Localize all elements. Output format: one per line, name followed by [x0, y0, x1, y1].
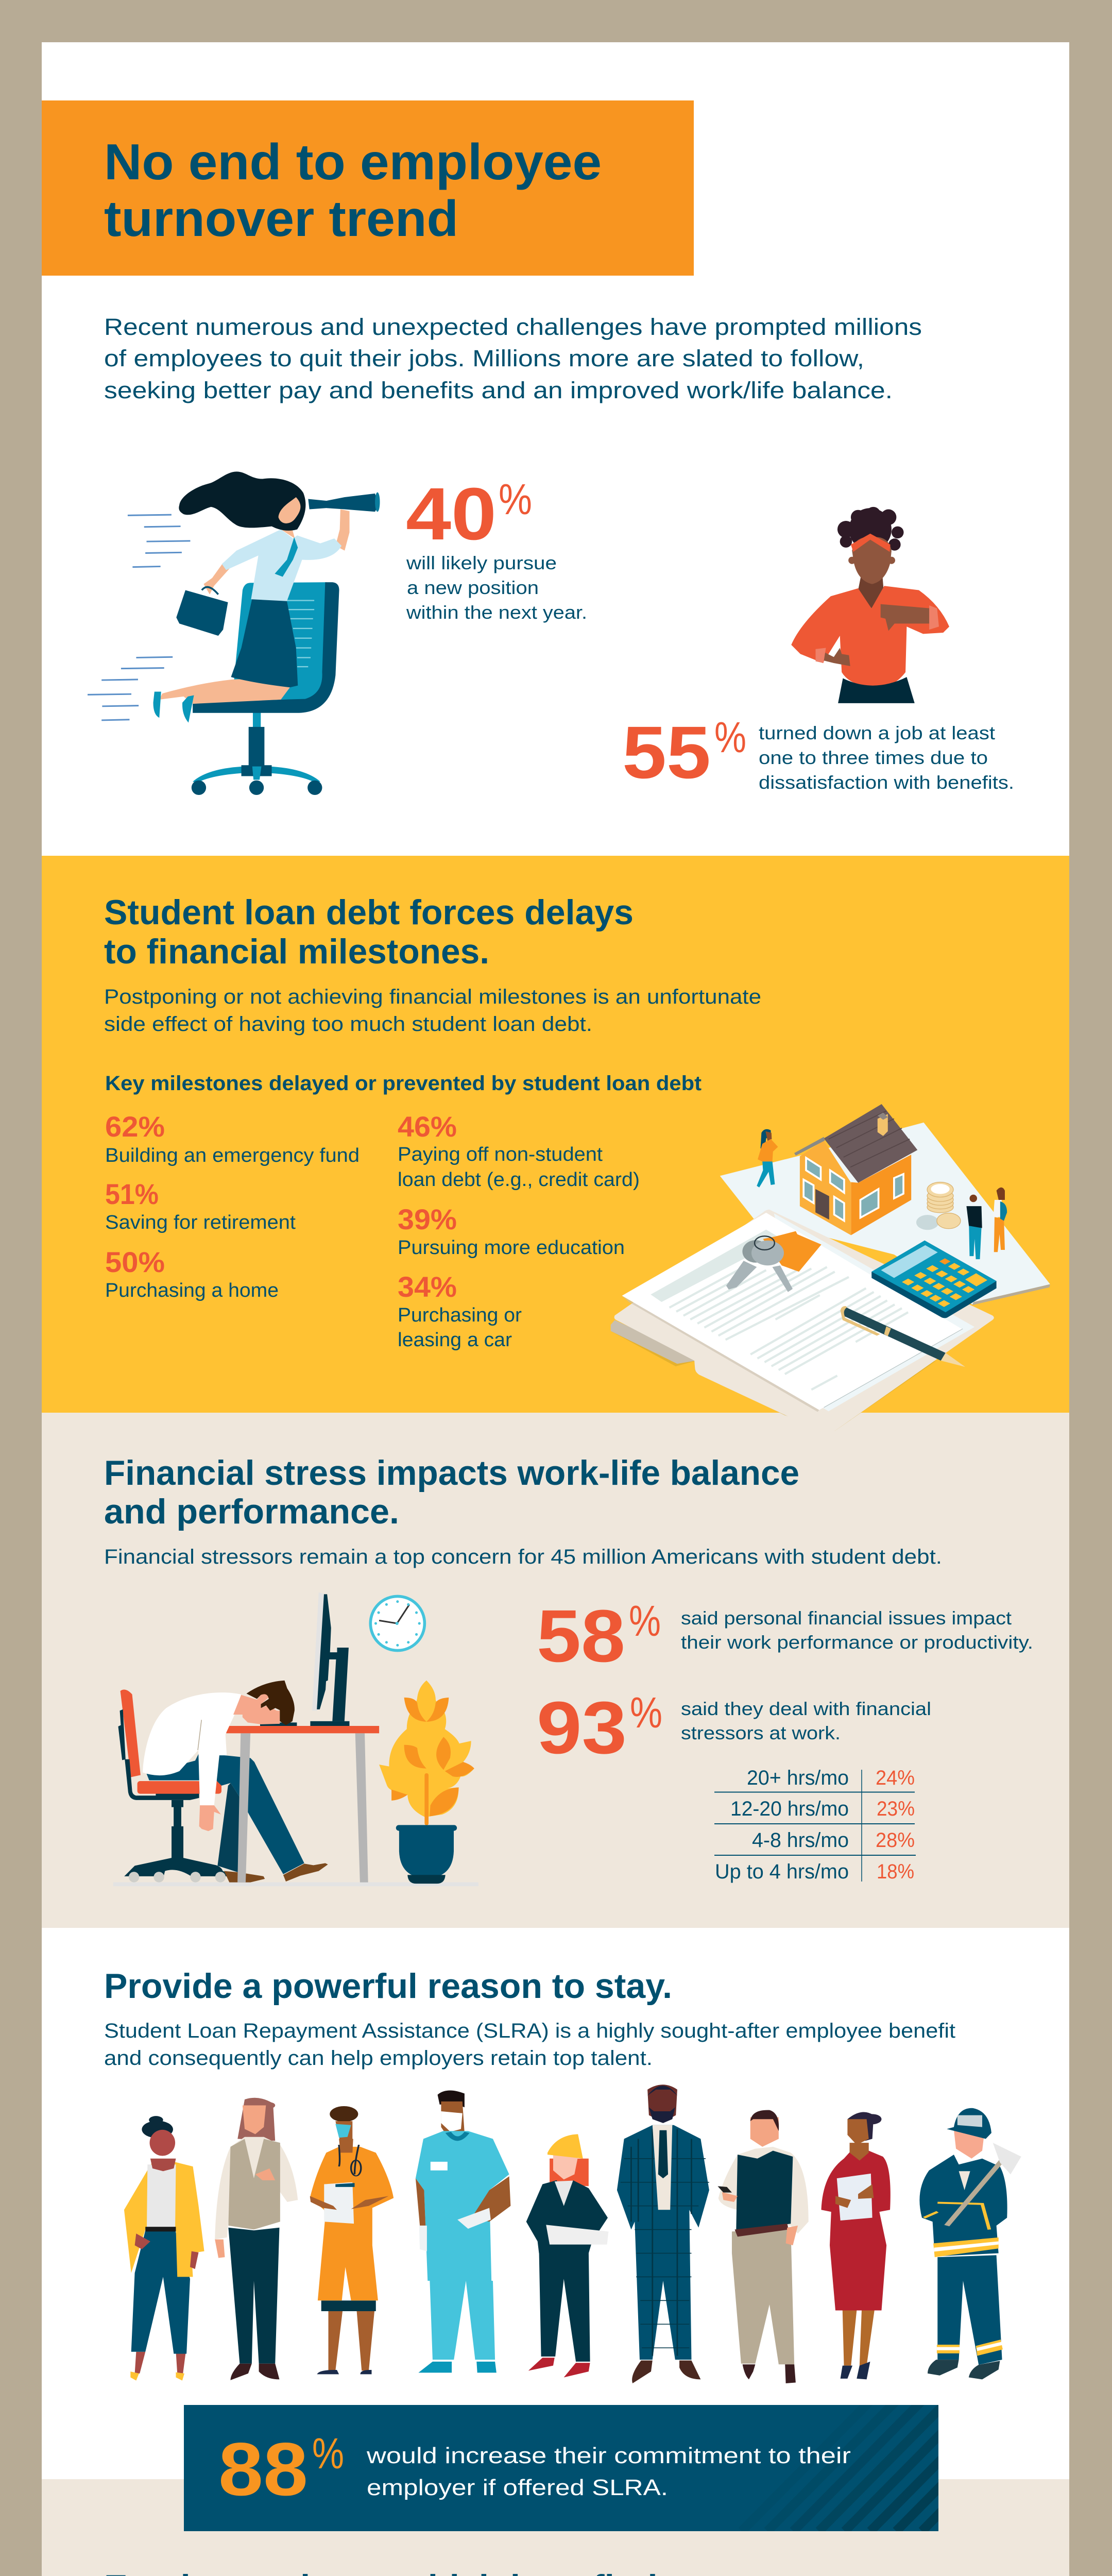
person: man in plaid suit [617, 2084, 709, 2383]
icon: woman on office chair with spyglass [88, 471, 380, 795]
panel: student loan debt milestones [42, 856, 1069, 1413]
table: hours per month: 20+ hrs/mo [747, 1767, 849, 1789]
heading: Student loan debt forces delays [104, 893, 634, 932]
milestone list: right column: Paying off non-student [398, 1144, 603, 1165]
callout: 88 percent banner [184, 2405, 938, 2531]
panel: provide a reason to stay [42, 1928, 1069, 2479]
stat: 40 percent: 40 [406, 472, 497, 555]
stat: 58 percent: their work performance or productivity. [681, 1632, 1033, 1653]
heading [104, 893, 634, 971]
panel: financial stress [42, 1413, 1069, 1928]
callout: 88 percent banner: 88 [218, 2427, 308, 2511]
stat: 58 percent [537, 1595, 1033, 1677]
stat: 93 percent: said they deal with financial [681, 1698, 931, 1719]
milestone list: left column: 62% [105, 1110, 165, 1143]
intro text: Postponing or not achieving financial milestones is an unfortunate [104, 986, 761, 1008]
icon: house, keys, calculator and documents [611, 1104, 1050, 1433]
intro text: seeking better pay and benefits and an improved work/life balance. [104, 377, 893, 403]
heading: Provide a powerful reason to stay. [104, 1967, 672, 2006]
heading: Financial stress impacts work-life balance [104, 1453, 799, 1493]
milestone list: right column: loan debt (e.g., credit card) [398, 1169, 640, 1191]
table: hours per month: 23% [877, 1798, 915, 1820]
milestone list: right column: Pursuing more education [398, 1237, 625, 1259]
milestone list: right column: leasing a car [398, 1329, 512, 1351]
person: woman in vest [215, 2098, 298, 2380]
stat: 40 percent: a new position [407, 577, 539, 598]
table: hours per month: 28% [876, 1829, 915, 1852]
milestone list: left column: 50% [105, 1246, 165, 1278]
intro text: Recent numerous and unexpected challenges have prompted millions [104, 314, 922, 340]
milestone list: left column: Building an emergency fund [105, 1145, 360, 1166]
milestone list: right column: 34% [398, 1270, 457, 1303]
panel: employee turnover [42, 42, 1069, 856]
heading: to financial milestones. [104, 932, 489, 971]
stat: 93 percent: % [630, 1688, 662, 1737]
title: No end to employee [104, 133, 602, 190]
heading [104, 1453, 799, 1531]
stat: 93 percent: 93 [537, 1686, 627, 1769]
intro text [104, 986, 761, 1036]
stat: 58 percent: said personal financial issues impact [681, 1607, 1012, 1629]
intro text: Student Loan Repayment Assistance (SLRA) is a highly sought-after employee benefit [104, 2020, 955, 2042]
icon: woman giving thumbs down [791, 507, 949, 703]
milestone list: left column: Purchasing a home [105, 1280, 279, 1301]
milestone list: left column [105, 1110, 360, 1301]
person: surgeon in scrubs [416, 2091, 510, 2372]
subheading: Key milestones delayed or prevented by student loan debt [105, 1072, 702, 1095]
milestone list: left column: Saving for retirement [105, 1212, 296, 1233]
person: firefighter with axe [919, 2108, 1021, 2379]
stat: 40 percent: within the next year. [406, 602, 587, 623]
stat: 55 percent: turned down a job at least [759, 722, 995, 743]
table: hours per month [714, 1767, 916, 1883]
table: hours per month: 24% [876, 1767, 915, 1789]
stat: 55 percent: one to three times due to [759, 747, 988, 768]
milestone list: right column [398, 1110, 640, 1351]
stat: 55 percent: % [714, 713, 746, 761]
milestone list: left column: 51% [105, 1178, 159, 1210]
person: engineer with hard hat [526, 2134, 608, 2378]
callout: 88 percent banner: % [312, 2429, 344, 2478]
stat: 40 percent: will likely pursue [406, 552, 557, 573]
stat: 40 percent [406, 472, 587, 623]
stat: 55 percent: dissatisfaction with benefits. [759, 772, 1014, 793]
callout: 88 percent banner: would increase their commitment to their [366, 2443, 851, 2468]
milestone list: right column: 39% [398, 1203, 457, 1235]
intro text: Financial stressors remain a top concern for 45 million Americans with student debt. [104, 1546, 942, 1568]
stat: 58 percent: % [629, 1597, 661, 1645]
stat: 40 percent: % [499, 475, 532, 523]
title: turnover trend [104, 190, 458, 247]
title [104, 133, 602, 247]
intro text: of employees to quit their jobs. Millions more are slated to follow, [104, 345, 864, 371]
intro text [104, 2020, 955, 2070]
stat: 93 percent [537, 1686, 931, 1769]
person: nurse in orange [310, 2106, 394, 2374]
stat: 55 percent [622, 711, 1014, 794]
intro text: side effect of having too much student loan debt. [104, 1013, 592, 1036]
table: hours per month: 18% [877, 1860, 914, 1883]
person: woman in red dress [821, 2112, 891, 2379]
person: woman in yellow cardigan [124, 2116, 204, 2381]
table: hours per month: 12-20 hrs/mo [730, 1798, 849, 1820]
icons: row of nine diverse employees [124, 2084, 1021, 2383]
milestone list: right column: Purchasing or [398, 1304, 522, 1326]
callout: 88 percent banner: employer if offered SLRA. [367, 2475, 668, 2500]
stat: 93 percent: stressors at work. [681, 1722, 841, 1743]
person: man in sweater vest with phone [717, 2110, 809, 2383]
stat: 55 percent: 55 [622, 711, 711, 794]
table: hours per month: Up to 4 hrs/mo [715, 1860, 849, 1883]
milestone list: right column: 46% [398, 1110, 457, 1143]
table: hours per month: 4-8 hrs/mo [752, 1829, 849, 1852]
icon: exhausted man at desk [113, 1592, 478, 1886]
intro text [104, 314, 922, 403]
heading: and performance. [104, 1492, 399, 1531]
stat: 58 percent: 58 [537, 1595, 625, 1677]
intro text: and consequently can help employers retain top talent. [104, 2047, 653, 2070]
title banner [42, 100, 694, 276]
